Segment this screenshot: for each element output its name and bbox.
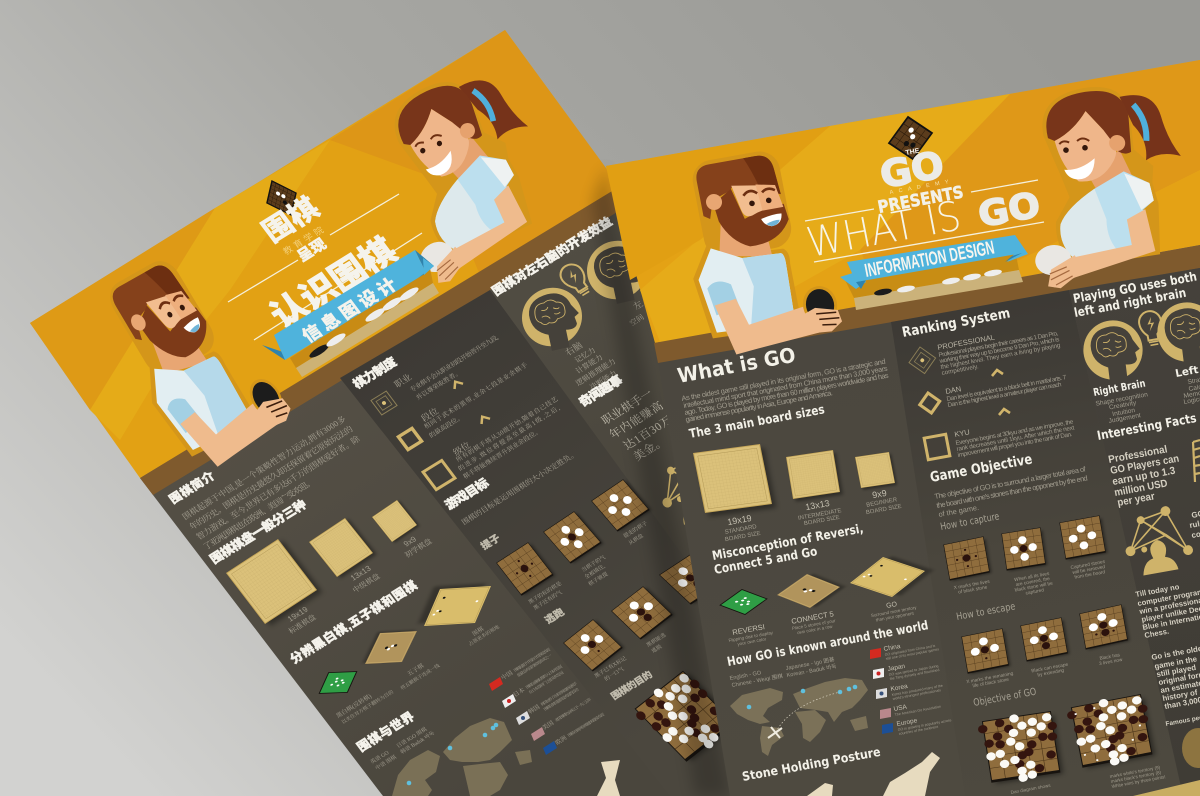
subheading objective: 围棋的目的 — [609, 668, 655, 702]
fact: earnings: Professional — [1107, 444, 1168, 466]
fact: oldest: still played — [1156, 663, 1197, 679]
heading: misconception: Misconception of Reversi, — [711, 520, 864, 563]
escape captions: life of black stone — [972, 677, 1010, 689]
ribbon text: INFORMATION DESIGN — [863, 238, 996, 282]
famous people — [1165, 712, 1200, 768]
intro paragraph: As the oldest game still played in its original form, GO is a strategic and — [681, 357, 886, 403]
escape captions: 黑棋能逃 — [644, 631, 668, 649]
reversi board — [719, 589, 768, 615]
game board on table — [290, 268, 439, 377]
fact: computer — [1135, 582, 1200, 640]
section: objective — [442, 449, 741, 768]
kyu text — [954, 418, 1075, 459]
ribbon text: 信息图设计 — [298, 272, 404, 346]
kyu text: Everyone begins at 30kyu and as we improve, the — [955, 418, 1074, 447]
misconception labels: Surround more territory — [871, 605, 918, 618]
fact: oldest: history of — [1162, 688, 1199, 703]
logo icon — [267, 181, 296, 215]
header panel: orange — [606, 60, 1200, 343]
professional text: PROFESSIONAL — [937, 333, 995, 352]
heading: world: How GO is known around the world — [726, 617, 929, 669]
misconception labels: your own color — [737, 636, 767, 647]
chevrons — [992, 370, 1010, 415]
misconception labels: 以夹住对方棋子翻转为目的 — [340, 689, 395, 726]
right brain labels: Shape recognition — [1095, 391, 1149, 408]
board 13x13 — [786, 450, 843, 502]
fact: computer: Chess. — [1144, 627, 1170, 640]
board labels — [724, 488, 902, 543]
rank text: 级位 — [451, 439, 472, 458]
capture captions: 当棋子的气 — [579, 553, 608, 574]
academy line: 教育学院 — [280, 222, 329, 257]
flag labels: GO is growing in popularity across — [897, 718, 952, 732]
rank text: 的最高段位。 — [427, 412, 465, 440]
flag labels: Korea has produced many of the — [891, 684, 943, 697]
woman character — [356, 53, 572, 290]
flag labels: The American Go Association — [894, 705, 941, 717]
professional text: working their way up to become 9 Dan Pro, which is — [938, 336, 1060, 365]
rank text: 所有的棋手将从30级开始,随着自己技艺 — [454, 394, 560, 464]
hand illustration — [597, 760, 620, 796]
rank text: 段位 — [419, 405, 440, 424]
flag labels: Europe — [896, 717, 918, 728]
board labels: BOARD SIZE — [724, 531, 761, 543]
fact: earnings: earn up to 1.3 — [1111, 466, 1176, 488]
plane — [768, 727, 782, 738]
ribbon — [262, 250, 434, 360]
poster body — [140, 190, 1000, 796]
poster body — [655, 245, 1200, 796]
wood band — [654, 245, 1200, 363]
escape boards — [961, 604, 1129, 675]
flag labels: Japan — [887, 663, 906, 673]
right brain labels — [563, 298, 646, 392]
language names: 韩语 Baduk 바둑 — [398, 729, 437, 756]
panel: ranking — [891, 290, 1200, 796]
board labels: 标准棋盘 — [286, 612, 318, 636]
flag labels: 在日本得到广泛普及和发展 — [527, 669, 565, 695]
language names: 中语 围棋 — [373, 753, 398, 772]
fact: earnings: GO Players can — [1109, 454, 1180, 477]
hand illustrations — [807, 752, 940, 796]
rank text: 的进步,级位将提高至最高1级,之后, — [456, 403, 562, 473]
escape captions: 黑子已有X标记 — [592, 654, 628, 680]
man character — [90, 241, 298, 478]
subheading objective: Objective of GO — [972, 687, 1037, 709]
escape captions: Black can escape — [1031, 662, 1069, 674]
professional text: the highest level. They earn a living by playing — [940, 342, 1061, 371]
escape boards — [563, 553, 726, 672]
flag labels: 美国围棋协会成立于一九三五年 — [553, 696, 592, 723]
objective text: the board with one's stones than the opponent by the end — [936, 473, 1088, 510]
map pins — [747, 685, 857, 709]
board labels: 13x13 — [349, 564, 373, 583]
the: THE — [905, 148, 920, 157]
fact text: 达1百30万 — [620, 413, 675, 452]
right brain labels: 空间 — [627, 312, 646, 328]
flag labels: 日本 — [511, 686, 526, 699]
heading: facts: 奇闻趣事 — [576, 372, 626, 409]
objective text: The objective of GO is to surround a larger total area of — [934, 464, 1087, 501]
heading: Ranking System — [901, 305, 1012, 341]
right brain labels: 决断能力 — [587, 368, 619, 392]
right brain labels: Intuition — [1112, 407, 1136, 418]
board labels: 9x9 — [402, 534, 419, 549]
flag labels: countries of the continent — [898, 725, 938, 736]
capture captions: 提走的棋子 — [621, 519, 650, 540]
misconception labels: 黑白棋(反转棋) — [334, 692, 373, 720]
shadow of front poster — [592, 166, 730, 796]
heading: 围棋简介 — [166, 468, 217, 506]
right brain labels: Creativity — [1109, 399, 1138, 411]
panel: ranking — [340, 290, 790, 796]
ribbon — [840, 235, 1028, 292]
board 13x13 — [309, 517, 377, 579]
board labels: BOARD SIZE — [865, 504, 902, 516]
header panel: orange — [30, 30, 622, 478]
body: 围棋起源于中国,是一个策略性智力运动,拥有3000多 — [180, 414, 348, 522]
connect 5 board — [777, 572, 846, 609]
capture captions — [526, 519, 650, 612]
capture captions: from the board — [1074, 569, 1106, 581]
objective captions — [1010, 765, 1166, 795]
flag labels — [883, 643, 952, 736]
game board on table — [845, 250, 1023, 310]
icon: dan — [398, 428, 422, 450]
dan text: Dan level is equivalent to a black belt in martial arts. 7 — [946, 374, 1067, 403]
wood band — [140, 185, 630, 495]
board labels — [286, 534, 434, 636]
objective captions: marks white's territory (9) — [1109, 765, 1161, 779]
flag labels — [499, 646, 605, 747]
heading: objective: Game Objective — [929, 451, 1034, 486]
flag labels: still one of its most popular games — [885, 647, 940, 661]
capture captions: black stone will be — [1014, 581, 1054, 593]
flag labels: 中国 — [499, 669, 514, 682]
board 19x19 — [226, 537, 322, 628]
fact: earnings — [1107, 444, 1180, 509]
misconception labels — [728, 601, 918, 647]
capture boards — [943, 515, 1107, 582]
fact: rules — [1189, 509, 1200, 540]
flag labels: 韩国培养了许多世界级职业棋手 — [539, 680, 578, 707]
icon: right brain — [1080, 317, 1146, 387]
academy: ACADEMY — [889, 179, 950, 196]
rule lines — [805, 180, 1044, 262]
board 9x9 — [372, 499, 420, 544]
flag labels: the Tang dynasty and flourished — [889, 668, 940, 681]
kyu text: rank decreases until 1kyu. After which the next — [956, 424, 1075, 453]
misconception labels: 五子棋 — [405, 661, 426, 678]
escape captions — [966, 652, 1124, 689]
icon: network — [1121, 503, 1195, 577]
flag labels: world's strongest professionals — [892, 688, 941, 701]
heading: What is GO — [675, 343, 798, 388]
language names: Korean - Baduk 바둑 — [786, 662, 837, 679]
icon: left brain — [582, 235, 653, 309]
right brain labels: Judgement — [1108, 412, 1142, 425]
left brain labels — [1174, 358, 1200, 406]
board 9x9 — [855, 452, 897, 490]
fact: oldest: game in the — [1154, 654, 1198, 671]
flag labels: 围棋在韩国是很受欢迎的活动 — [542, 686, 580, 712]
right brain labels: 右脑 — [563, 339, 584, 358]
portrait — [1182, 728, 1200, 768]
body: 年的历史。围棋是历史最悠久却还保留着它原始玩法的 — [187, 424, 355, 532]
heading: misconception: 分辨黑白棋,五子棋和围棋 — [287, 577, 420, 666]
rank text: 专业棋手会从职业初段开始晋升至九段, — [408, 333, 500, 394]
icon: professional — [371, 391, 397, 415]
objective text: of the game. — [938, 503, 980, 519]
capture captions: X marks the lives — [953, 579, 991, 591]
flag labels: 韩国 — [526, 703, 541, 716]
body: 了亚洲,围棋也在欧洲、美国广受欢迎。 — [201, 476, 316, 552]
misconception labels: GO — [886, 601, 898, 610]
main title: 认识围棋 — [263, 232, 404, 335]
language names: Chinese - Weiqi 围棋 — [731, 672, 784, 689]
icon: kyu — [924, 434, 950, 460]
escape captions — [592, 631, 668, 683]
icon: kyu — [423, 460, 455, 490]
rank text: 棋手将能继续晋升到业余段位。 — [461, 426, 543, 481]
board labels: STANDARD — [724, 524, 758, 536]
world map — [392, 718, 532, 796]
board labels: 9x9 — [871, 488, 887, 500]
escape captions: 的一口气 — [602, 665, 626, 683]
icon: professional — [909, 347, 936, 374]
board labels: 13x13 — [804, 498, 830, 512]
fact: computer: Till today no — [1135, 582, 1180, 599]
fact text — [598, 386, 675, 463]
intro paragraph: ago. Today, GO is played by more than 60 million players worldwide and has — [684, 371, 890, 417]
heading: 游戏目标 — [442, 475, 492, 512]
section: intro — [166, 414, 620, 796]
capture captions: 黑子的标的棋是 — [526, 579, 564, 606]
flag labels: 欧洲 — [553, 734, 568, 747]
icon: coins — [1193, 440, 1200, 482]
heading: posture: Stone Holding Posture — [741, 744, 882, 784]
heading: world: 围棋与世界 — [354, 709, 418, 754]
logo text: 围棋 — [257, 193, 325, 249]
escape captions: 逃脱 — [649, 642, 664, 655]
escape captions: by extending — [1037, 668, 1065, 678]
right brain labels: 计算能力 — [573, 352, 605, 376]
kyu text: improvement will propel you into the rank of Dan. — [957, 431, 1073, 459]
icon: right brain — [517, 282, 588, 356]
woman character — [1004, 74, 1200, 292]
board 19x19 — [693, 444, 776, 517]
objective text — [934, 464, 1088, 519]
language names: 日语 IGO 围棋 — [394, 725, 429, 750]
misconception labels: Flipping disk to display — [728, 630, 774, 643]
body: 智力游戏。至今,世界已有多达6千万的围棋爱好者。除 — [194, 434, 362, 542]
escape captions: X marks the remaining — [966, 671, 1014, 685]
heading: board sizes: 围棋棋盘一般分三种 — [207, 497, 309, 566]
intro paragraph — [681, 357, 890, 424]
heading: 围棋对左右脑的开发效益 — [489, 214, 616, 298]
rank text: 相同于武术的黑带,业余七段是业余棋手 — [422, 360, 530, 431]
capture captions: are covered, the — [1015, 576, 1051, 588]
language names: Japanese - Igo 囲碁 — [785, 655, 836, 672]
board labels: 19x19 — [726, 513, 752, 527]
man character — [672, 143, 845, 359]
language names: 英语 GO — [368, 749, 390, 766]
right brain labels — [1092, 378, 1149, 425]
professional text: competitively. — [941, 363, 979, 377]
connect 5 board — [362, 630, 418, 664]
section: Ranking — [901, 305, 1166, 795]
flags — [870, 648, 893, 734]
icon: bulb — [1137, 309, 1165, 347]
rank text: 职业 — [392, 371, 413, 390]
section: ranking — [350, 333, 562, 490]
heading: board sizes: The 3 main board sizes — [688, 401, 826, 441]
logo icon — [889, 117, 932, 159]
icon: left brain — [1154, 299, 1200, 369]
language names — [368, 725, 437, 772]
flags — [489, 677, 557, 755]
misconception labels: 占领更多的领地 — [467, 624, 501, 648]
capture boards — [496, 479, 651, 596]
title block: Chinese — [228, 181, 434, 360]
capture captions: will be removed — [1072, 564, 1106, 576]
plane route — [776, 692, 840, 732]
fact: oldest — [1151, 643, 1200, 711]
professional text: Professional players begin their careers as 1 Dan Pro, — [938, 330, 1059, 359]
language names: English - GO — [729, 670, 762, 682]
capture captions — [953, 559, 1106, 597]
fact text: 美金。 — [630, 434, 668, 463]
GO: GO — [975, 185, 1043, 236]
title block — [803, 117, 1044, 292]
misconception labels: REVERSI — [732, 622, 765, 637]
rule lines — [228, 194, 422, 340]
flag labels: 围棋在欧洲各地越来越受欢迎 — [566, 711, 605, 738]
dan text: Dan is the highest level a amateur player can reach — [947, 381, 1063, 409]
fact: earnings: million USD — [1113, 478, 1169, 499]
GO logo: GO — [877, 143, 947, 197]
objective captions: Dan diagram shows — [1010, 783, 1052, 795]
intro paragraph: intellectual mind sport that originated from China more than 3,000 years — [683, 364, 889, 410]
rank text — [392, 333, 562, 481]
capture captions: captured — [1025, 587, 1045, 597]
section: What is GO — [675, 343, 952, 796]
escape captions: Black has — [1099, 652, 1121, 662]
language names — [729, 655, 837, 689]
misconception labels: Place 5 stones of your — [792, 618, 836, 631]
capture captions: When all its lives — [1014, 571, 1050, 583]
flag labels: 围棋在唐朝时期传入日本并发展 — [524, 663, 563, 690]
subheading escape: 逃跑 — [542, 605, 567, 626]
objective captions: White wins by three points! — [1111, 774, 1166, 789]
icon: network — [650, 448, 732, 529]
escape captions: 3 lives now — [1099, 657, 1124, 667]
subheading capture: How to capture — [939, 511, 1000, 533]
flag labels: China — [883, 643, 901, 653]
flag labels: 是最受欢迎的棋类游戏之一 — [515, 652, 553, 678]
big board right — [1065, 691, 1157, 772]
fact text: 职业棋手一 — [598, 386, 656, 427]
world map — [730, 678, 868, 756]
board labels: INTERMEDIATE — [798, 508, 842, 522]
icon: bulb — [556, 260, 595, 299]
capture captions: 全被填住, — [582, 562, 607, 581]
fact text: 年内能赚高 — [606, 399, 666, 441]
board labels: BEGINNER — [866, 497, 898, 509]
presents: 呈现 — [294, 236, 330, 265]
section: brain — [489, 214, 732, 529]
flag labels: 美国 — [540, 719, 555, 732]
right brain labels: 左 — [631, 298, 645, 312]
misconception labels: own color in a row — [797, 624, 834, 635]
chevrons — [451, 379, 490, 424]
kyu text: KYU — [954, 427, 970, 439]
reversi board — [319, 671, 357, 694]
section: Brain — [1072, 269, 1200, 768]
flag labels: 围棋起源于中国,在中国深受欢迎 — [512, 646, 552, 674]
objective captions: marks black's territory (8) — [1110, 770, 1162, 784]
flag labels: GO originated from China and is — [884, 644, 936, 657]
panel: English poster — [606, 60, 1200, 796]
capture captions: 棋子被提 — [586, 570, 610, 588]
capture captions: of black stone — [958, 584, 988, 596]
what is: WHAT IS — [803, 192, 965, 267]
misconception labels: CONNECT 5 — [791, 609, 835, 626]
board labels: BOARD SIZE — [803, 515, 840, 527]
big board — [629, 667, 741, 768]
panel: Chinese poster — [30, 30, 1000, 796]
capture captions: 从棋盘 — [626, 531, 645, 547]
board labels: 中级棋盘 — [350, 571, 382, 595]
subheading capture: 提子 — [478, 531, 503, 552]
misconception labels: 围棋 — [470, 624, 486, 638]
heading: 棋力制度 — [350, 354, 400, 391]
rank text: 并以尊荣取胜者。 — [414, 368, 463, 402]
icon: dan — [920, 393, 940, 413]
panel: brain — [490, 198, 800, 720]
presents: PRESENTS — [876, 182, 965, 217]
flag labels: GO was spread to Japan during — [888, 664, 939, 677]
go board — [417, 583, 492, 626]
board labels: 初学棋盘 — [402, 536, 434, 560]
heading: misconception — [711, 520, 864, 577]
intro paragraph: gained immense popularity in Asia, Europe and America. — [685, 388, 833, 424]
board labels: 19x19 — [286, 605, 310, 624]
flag labels: USA — [893, 704, 908, 713]
right brain labels: Right Brain — [1092, 378, 1147, 399]
go board — [850, 554, 933, 599]
big board left — [977, 708, 1065, 787]
right brain labels: 记忆力 — [572, 345, 597, 365]
misconception labels — [334, 624, 501, 726]
footer strip — [1133, 780, 1200, 796]
dan text: DAN — [945, 384, 962, 396]
body: 围棋的目标是运用围棋的大小决定胜负。 — [460, 449, 579, 527]
professional text — [937, 330, 1061, 377]
right brain labels: 逻辑推理能力 — [573, 356, 617, 388]
misconception labels: 将五颗棋子连成一线 — [399, 662, 441, 692]
fact: earnings: per year — [1116, 491, 1156, 509]
heading: misconception: Connect 5 and Go — [713, 543, 819, 577]
subheading escape: How to escape — [955, 601, 1016, 623]
panel: brain — [1069, 268, 1200, 787]
capture captions: Captured stones — [1070, 559, 1106, 571]
capture captions: 黑子还有的气 — [531, 588, 564, 612]
misconception labels: than your opponent — [875, 610, 915, 622]
flag labels: Korea — [890, 683, 909, 693]
